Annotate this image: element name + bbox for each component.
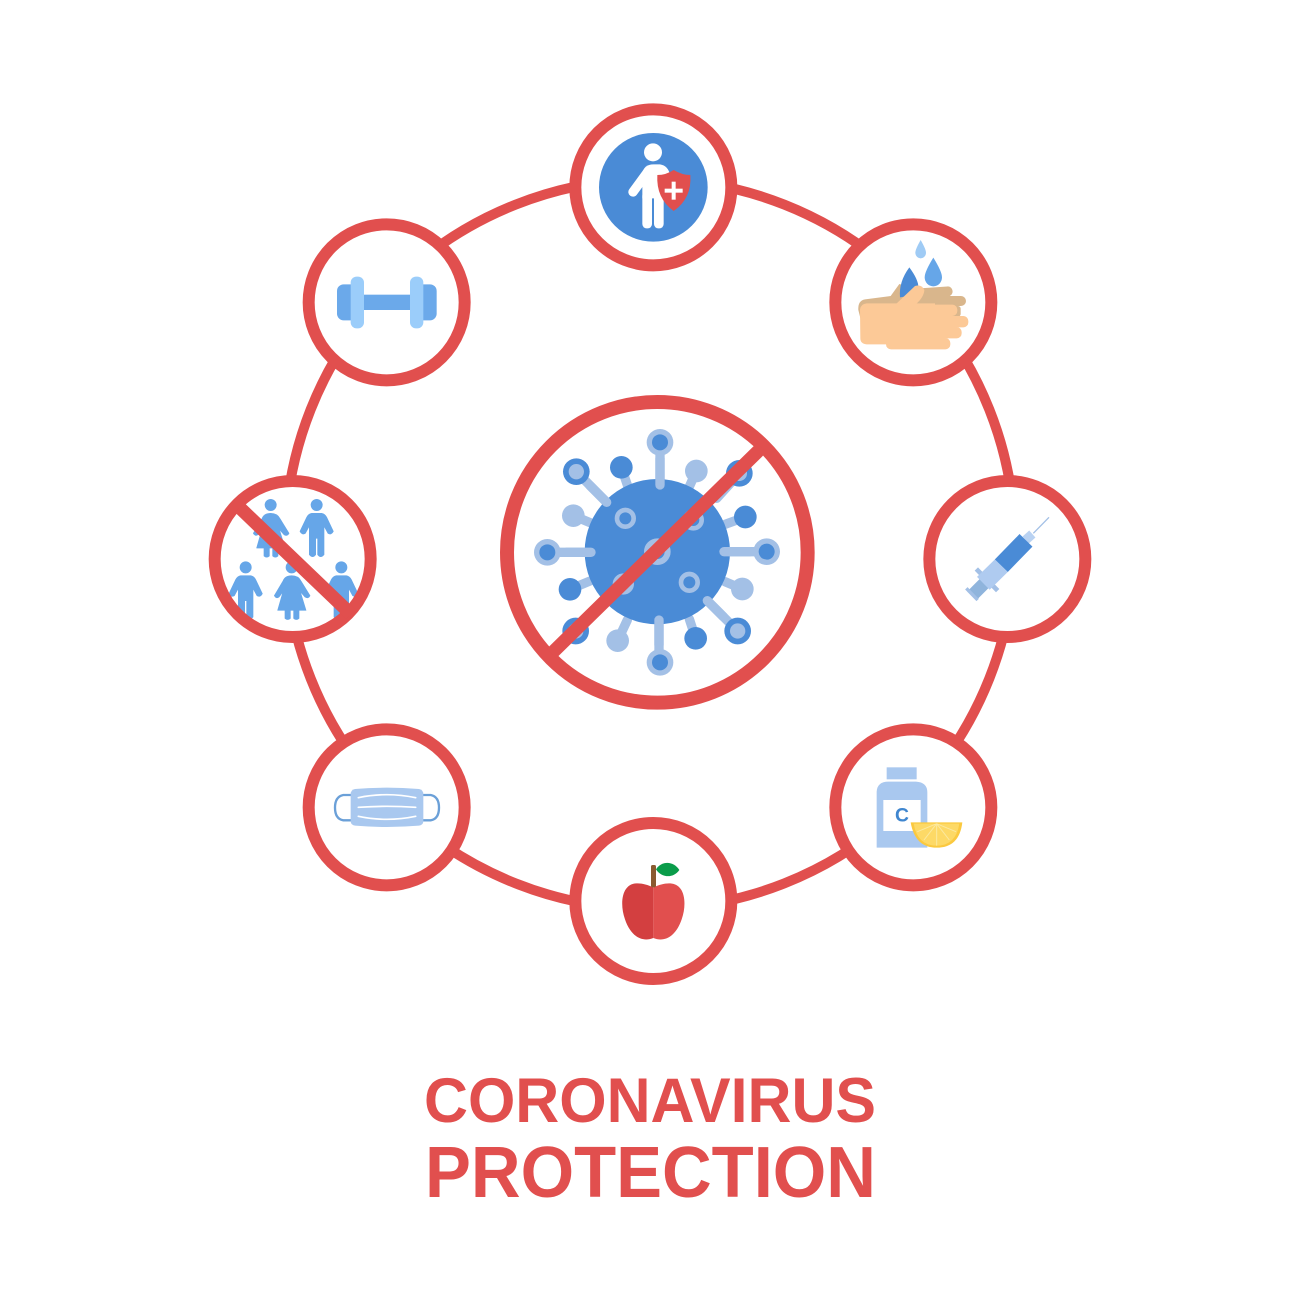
infographic canvas (208, 103, 1092, 1198)
woman upper (253, 499, 289, 557)
node: vaccine syringe (929, 481, 1085, 637)
connecting ring (285, 179, 1015, 909)
node: face mask (309, 729, 465, 885)
node: hand washing (835, 224, 991, 380)
node: vitamin C and lemon (835, 729, 991, 885)
node: apple (575, 823, 731, 979)
title line two: PROTECTION (425, 1133, 876, 1213)
node: vitamin C and lemon: C (895, 806, 909, 827)
title (424, 1066, 876, 1213)
node: no crowds (215, 481, 371, 637)
node: dumbbell (309, 224, 465, 380)
man lower left (229, 562, 262, 619)
centre icon: crossed-out virus (507, 402, 808, 703)
man upper (300, 499, 333, 557)
man lower right (329, 561, 357, 618)
title line one: CORONAVIRUS (424, 1066, 876, 1136)
node: protected person (575, 109, 731, 265)
woman lower (274, 562, 310, 619)
